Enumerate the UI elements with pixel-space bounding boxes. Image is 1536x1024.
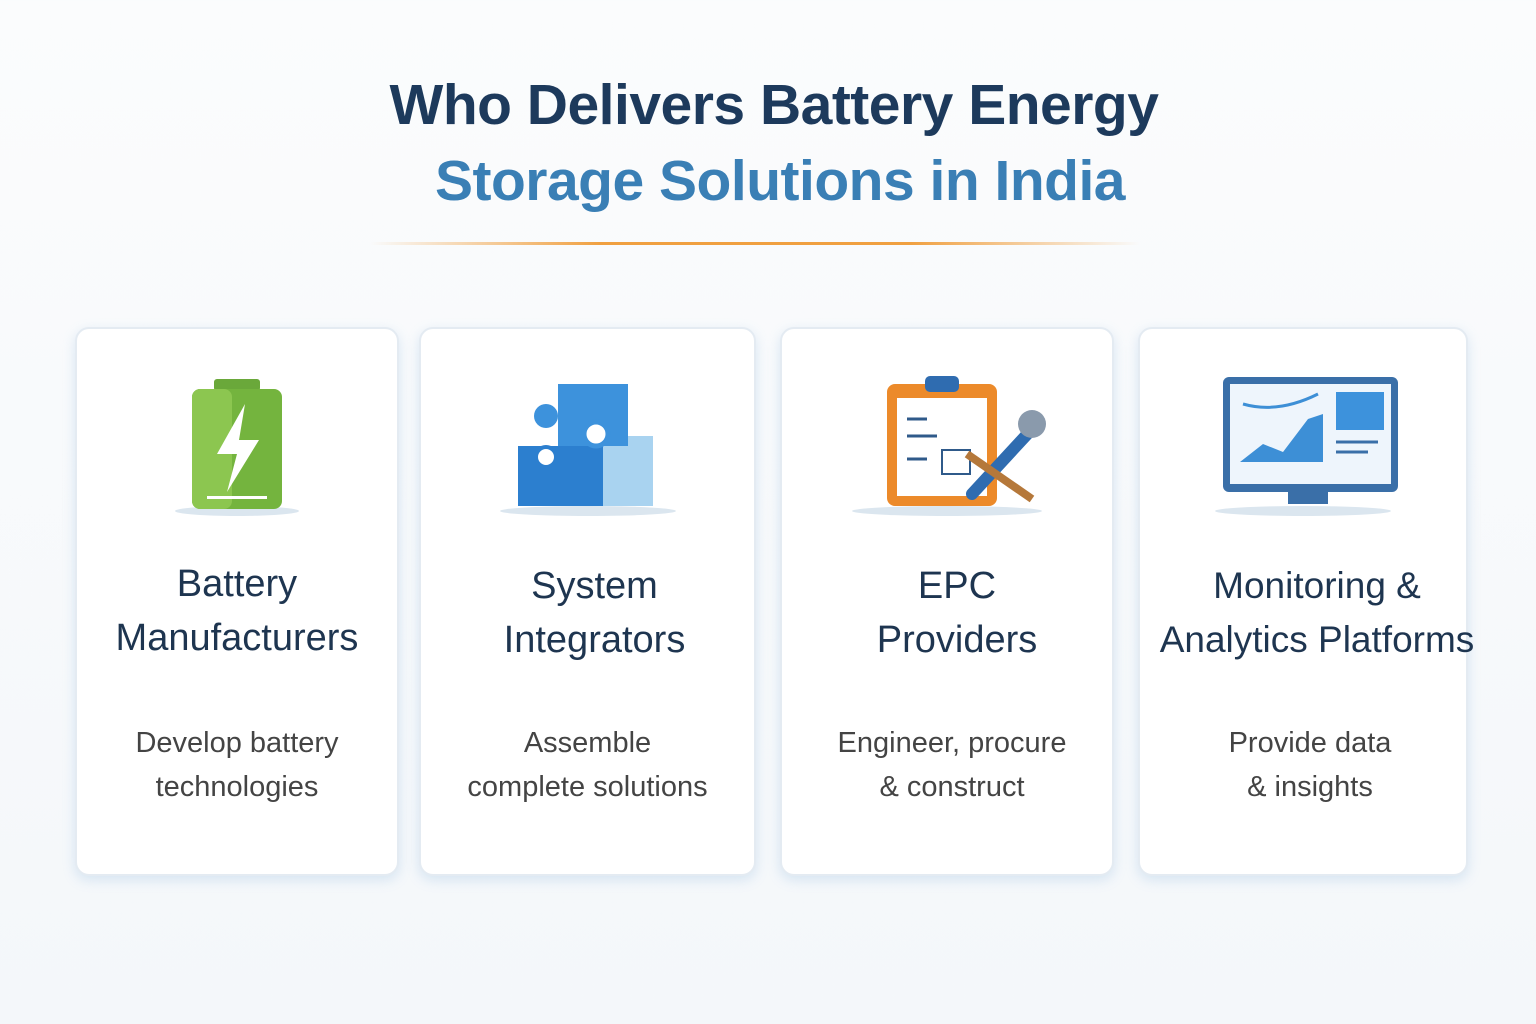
description: technologies	[156, 771, 318, 803]
icon: battery	[175, 379, 299, 516]
description	[135, 727, 339, 803]
description: Engineer, procure	[838, 727, 1066, 759]
heading: Providers	[877, 619, 1037, 661]
icon: puzzle	[500, 384, 676, 516]
panel: monitoring platforms	[1138, 327, 1468, 876]
heading: Integrators	[504, 619, 685, 661]
description	[838, 727, 1066, 803]
text: Storage Solutions in India	[435, 149, 1125, 213]
icon: clipboard and wrench	[852, 376, 1046, 516]
panel: system integrators	[419, 327, 756, 876]
description: complete solutions	[467, 771, 708, 803]
description	[467, 727, 708, 803]
description: Develop battery	[135, 727, 339, 759]
panel: EPC providers	[780, 327, 1114, 876]
heading	[877, 565, 1037, 661]
text: Who Delivers Battery Energy	[390, 73, 1158, 137]
heading: Analytics Platforms	[1160, 619, 1474, 660]
heading: Manufacturers	[116, 617, 358, 659]
description: & construct	[879, 771, 1025, 803]
heading: Monitoring &	[1213, 565, 1421, 606]
icon: monitor dashboard	[1215, 377, 1398, 516]
description: & insights	[1247, 771, 1373, 803]
heading	[504, 565, 685, 661]
heading	[116, 563, 358, 659]
heading	[1160, 565, 1474, 660]
title	[390, 73, 1159, 213]
divider accent	[370, 242, 1140, 245]
panel: battery manufacturers	[75, 327, 399, 876]
description: Provide data	[1229, 727, 1391, 759]
heading: Battery	[177, 563, 297, 605]
description	[1229, 727, 1392, 803]
heading: EPC	[918, 565, 996, 607]
heading: System	[531, 565, 658, 607]
description: Assemble	[524, 727, 651, 759]
